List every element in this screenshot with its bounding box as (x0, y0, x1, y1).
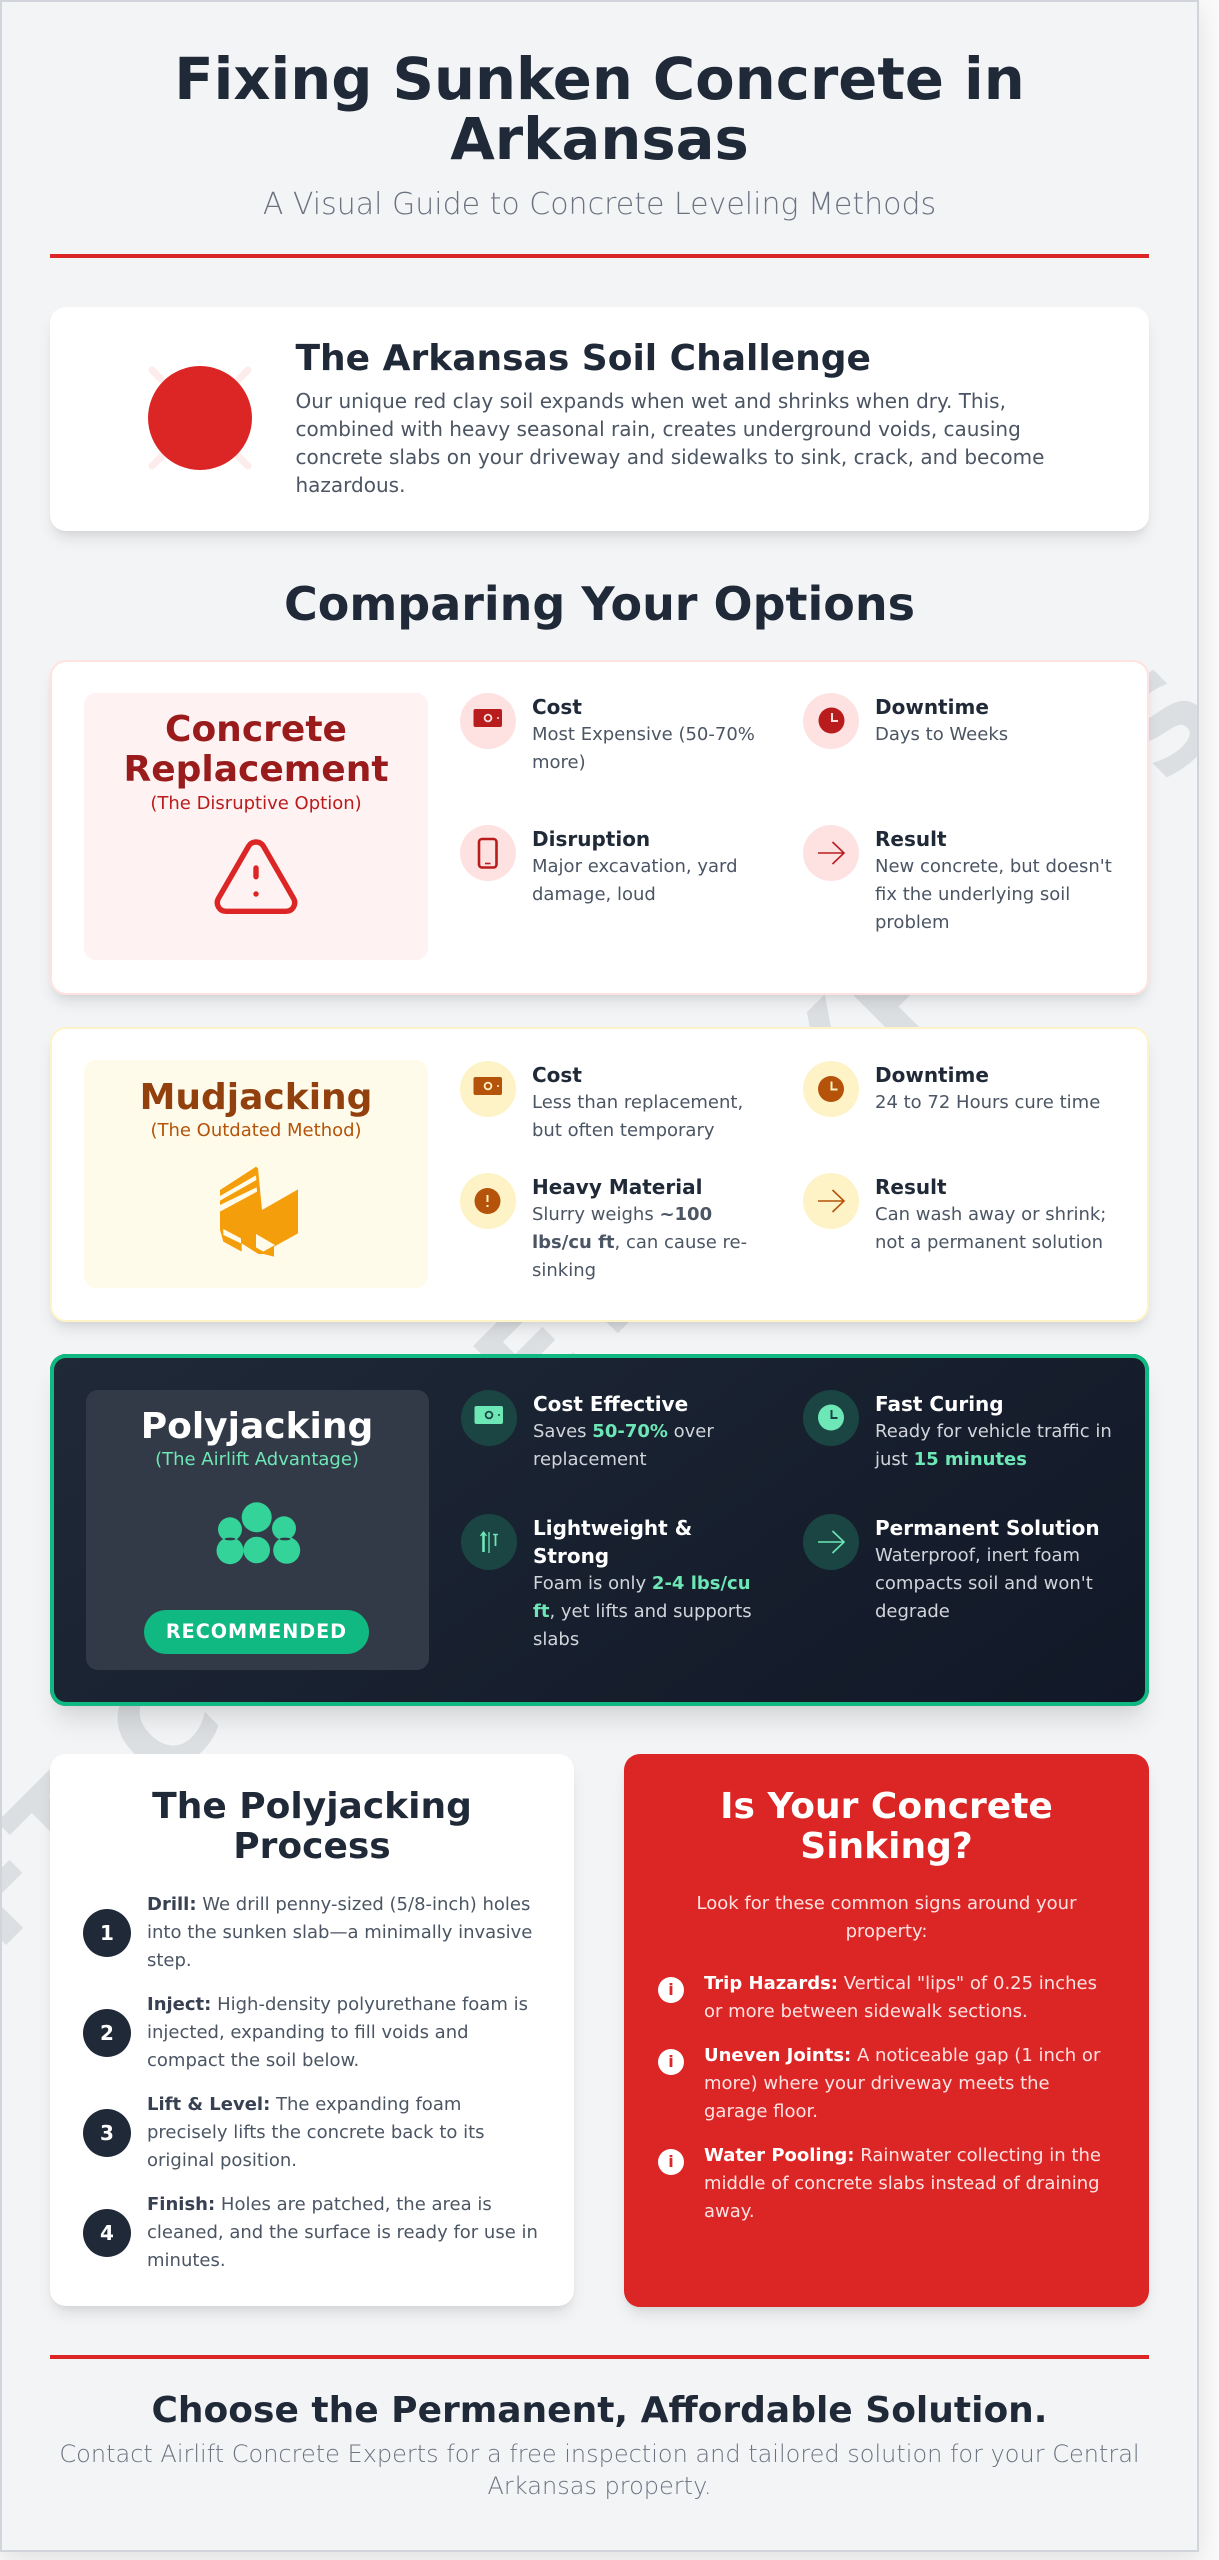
icon: info (658, 1977, 684, 2003)
label: Downtime (875, 695, 989, 719)
sign text (704, 2142, 1101, 2226)
option tagline: (The Outdated Method) (150, 1120, 362, 1141)
feature: heavy material (460, 1173, 747, 1280)
heading: process (152, 1786, 472, 1867)
sign text (704, 2042, 1100, 2126)
heading: process: Process (233, 1826, 391, 1867)
step text: precisely lifts the concrete back to its (147, 2122, 485, 2143)
number badge: 4 (100, 2221, 114, 2245)
description: Major excavation, yard (532, 856, 738, 877)
icon: alert (460, 1172, 516, 1228)
icon: arrow (803, 825, 859, 881)
feature: downtime (803, 1061, 1100, 1117)
title: Arkansas (450, 106, 749, 173)
icon: clock (803, 693, 859, 749)
description: damage, loud (532, 884, 656, 905)
footer text: Arkansas property. (488, 2472, 711, 2500)
text: soil challenge description: combined with heavy seasonal rain, creates underground voids, causing (296, 417, 1021, 441)
description: slabs (533, 1629, 579, 1650)
description (532, 1092, 743, 1140)
label: Fast Curing (875, 1392, 1004, 1416)
number badge (83, 2109, 131, 2157)
icon: sinking ground circle (148, 366, 252, 470)
sign: uneven joints (658, 2041, 1128, 2043)
description (533, 1421, 714, 1470)
step text: Inject: High-density polyurethane foam is (147, 1994, 528, 2015)
label: Permanent Solution (875, 1516, 1100, 1540)
title (174, 46, 1025, 173)
step text (147, 1994, 528, 2071)
sign text: more) where your driveway meets the (704, 2073, 1050, 2094)
heading: sinking: Is Your Concrete (720, 1786, 1053, 1827)
number badge: 2 (100, 2021, 114, 2045)
heading: sinking: Sinking? (800, 1826, 973, 1867)
description: 24 to 72 Hours cure time (875, 1092, 1100, 1112)
text: soil challenge description (296, 389, 1044, 497)
sign text: middle of concrete slabs instead of draining (704, 2173, 1100, 2194)
description: Can wash away or shrink; (875, 1204, 1106, 1224)
description (533, 1573, 752, 1650)
feature: cost effective (461, 1390, 714, 1470)
option summary: polyjacking (86, 1390, 428, 1670)
text: soil challenge description: concrete slabs on your driveway and sidewalks to sink, crack, and become (296, 445, 1044, 469)
sign: water pooling (658, 2141, 1128, 2143)
label: Lightweight & (533, 1516, 692, 1540)
icon: lightweight bars (461, 1514, 517, 1570)
description: Slurry weighs ~100 (532, 1204, 712, 1224)
text: soil challenge description: Our unique red clay soil expands when wet and shrinks when dry. This, (296, 389, 1006, 413)
step text: into the sunken slab—a minimally invasive (147, 1922, 532, 1943)
description: Less than replacement, (532, 1092, 743, 1112)
footer text (0, 2438, 1199, 2502)
header divider (50, 254, 1149, 258)
sign text: Trip Hazards: Vertical "lips" of 0.25 inches (704, 1973, 1097, 1994)
description: Waterproof, inert foam (875, 1545, 1080, 1566)
subtitle: A Visual Guide to Concrete Leveling Methods (263, 186, 936, 222)
number badge (83, 2209, 131, 2257)
heading: sinking (720, 1786, 1053, 1867)
label: Cost (532, 1062, 582, 1086)
panel: the Arkansas soil challenge (50, 307, 1149, 531)
description: more) (532, 752, 586, 773)
description (875, 1545, 1093, 1622)
feature: lightweight and strong (461, 1514, 752, 1650)
description: New concrete, but doesn't (875, 856, 1112, 877)
feature: result (803, 825, 1112, 933)
description (875, 1204, 1106, 1252)
footer text: Contact Airlift Concrete Experts for a free inspection and tailored solution for your Central (59, 2440, 1140, 2468)
icon: info (658, 2049, 684, 2075)
option name: Mudjacking (140, 1077, 372, 1118)
step text: Drill: We drill penny-sized (5/8-inch) holes (147, 1894, 530, 1915)
description: Days to Weeks (875, 724, 1008, 745)
step text: Finish: Holes are patched, the area is (147, 2194, 492, 2215)
footer heading: Choose the Permanent, Affordable Solution. (152, 2390, 1047, 2431)
icon: clock (803, 1390, 859, 1446)
icon: slurry layers (220, 1166, 298, 1257)
icon: phone (460, 825, 516, 881)
option summary: concrete replacement (84, 693, 428, 960)
icon: info: i (668, 2152, 674, 2171)
description (874, 1421, 1112, 1470)
step 2 (83, 1994, 528, 2071)
badge: recommended: RECOMMENDED (166, 1620, 347, 1643)
step text: step. (147, 1950, 192, 1971)
label: Downtime (875, 1062, 989, 1086)
description: just 15 minutes (875, 1449, 1027, 1470)
panel: polyjacking (50, 1354, 1149, 1706)
step text: original position. (147, 2150, 297, 2171)
intro text (624, 1890, 1149, 1946)
badge: recommended (144, 1610, 369, 1654)
icon: money (461, 1390, 517, 1446)
icon: money (460, 693, 516, 749)
sign text (704, 1970, 1097, 2026)
step text: minutes. (147, 2250, 226, 2271)
icon: money (460, 1060, 516, 1116)
description: not a permanent solution (875, 1232, 1103, 1252)
description: lbs/cu ft, can cause re- (532, 1232, 747, 1252)
step text: injected, expanding to fill voids and (147, 2022, 469, 2043)
sign text: Water Pooling: Rainwater collecting in the (704, 2145, 1101, 2166)
label (533, 1516, 692, 1568)
option name: Replacement (123, 749, 389, 790)
description: fix the underlying soil (875, 884, 1070, 905)
feature: result (803, 1173, 1106, 1252)
description: but often temporary (532, 1120, 714, 1140)
sign: trip hazards (658, 1969, 1128, 1971)
intro text: Look for these common signs around your (696, 1893, 1076, 1914)
heading: soil challenge: The Arkansas Soil Challenge (296, 338, 871, 379)
icon: clock (803, 1060, 859, 1116)
icon: info: i (668, 2052, 674, 2071)
label: Heavy Material (532, 1174, 702, 1198)
sign text: garage floor. (704, 2101, 818, 2122)
description (532, 856, 738, 905)
label: Disruption (532, 827, 650, 851)
description: Saves 50-70% over (533, 1421, 714, 1442)
number badge (83, 2009, 131, 2057)
feature: cost (460, 1061, 743, 1140)
step 1 (83, 1894, 532, 1971)
heading: process: The Polyjacking (152, 1786, 472, 1827)
panel: mudjacking (50, 1027, 1149, 1322)
description: degrade (875, 1601, 950, 1622)
option name: Polyjacking (141, 1406, 373, 1447)
option name: Concrete (165, 709, 347, 750)
label: Cost (532, 695, 582, 719)
description: Foam is only 2-4 lbs/cu (533, 1573, 751, 1594)
title: Fixing Sunken Concrete in (174, 46, 1025, 113)
description: Most Expensive (50-70% (532, 724, 755, 745)
sign text: or more between sidewalk sections. (704, 2001, 1028, 2022)
label: Cost Effective (533, 1392, 688, 1416)
feature: permanent solution (803, 1514, 1100, 1622)
sign text: away. (704, 2201, 755, 2222)
step 3 (83, 2094, 485, 2171)
step text (147, 2094, 485, 2171)
icon: warning triangle (214, 839, 298, 914)
text: soil challenge description: hazardous. (296, 473, 405, 497)
description: replacement (533, 1449, 647, 1470)
step text: cleaned, and the surface is ready for use in (147, 2222, 538, 2243)
step text: compact the soil below. (147, 2050, 359, 2071)
description (532, 724, 755, 773)
number badge: 3 (100, 2121, 114, 2145)
description (875, 856, 1112, 933)
label: Strong (533, 1544, 609, 1568)
icon: arrow (803, 1172, 859, 1228)
icon: info: i (668, 1980, 674, 1999)
description (532, 1204, 747, 1280)
heading: comparing your options: Comparing Your Options (284, 577, 915, 631)
intro text: property: (846, 1921, 927, 1942)
label: Result (875, 1174, 947, 1198)
option name (123, 709, 389, 790)
panel: concrete replacement (50, 660, 1149, 995)
number badge (83, 1909, 131, 1957)
description: Ready for vehicle traffic in (875, 1421, 1112, 1442)
step text: Lift & Level: The expanding foam (147, 2094, 461, 2115)
step text (147, 2194, 538, 2271)
description: ft, yet lifts and supports (533, 1601, 752, 1622)
feature: disruption (460, 825, 738, 905)
label: Result (875, 827, 947, 851)
description: compacts soil and won't (875, 1573, 1093, 1594)
option tagline: (The Disruptive Option) (150, 793, 362, 814)
step text (147, 1894, 532, 1971)
icon: info (658, 2149, 684, 2175)
panel: is your concrete sinking (624, 1754, 1149, 2307)
footer divider (50, 2355, 1149, 2359)
feature: fast curing (803, 1390, 1112, 1470)
number badge: 1 (100, 1921, 114, 1945)
panel: the polyjacking process (50, 1754, 574, 2306)
feature: cost (460, 693, 755, 773)
description: sinking (532, 1260, 596, 1280)
description: problem (875, 912, 949, 933)
icon: foam cells (216, 1502, 300, 1564)
feature: downtime (803, 693, 1008, 749)
icon: arrow (803, 1514, 859, 1570)
sign text: Uneven Joints: A noticeable gap (1 inch or (704, 2045, 1100, 2066)
option tagline: (The Airlift Advantage) (155, 1449, 359, 1470)
option summary: mudjacking (84, 1060, 428, 1288)
step 4 (83, 2194, 538, 2271)
